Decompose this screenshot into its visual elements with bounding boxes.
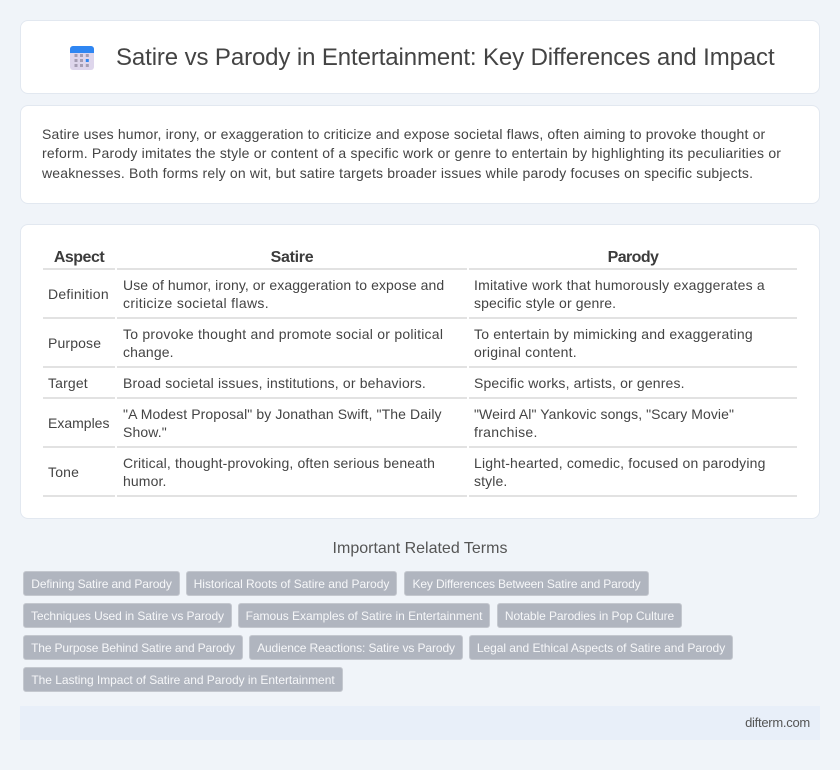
- related term tags: Techniques Used in Satire vs Parody: [31, 609, 224, 623]
- row: definition: Definition: [48, 286, 109, 302]
- related term tags: [23, 571, 733, 692]
- table header: [54, 249, 659, 266]
- table header: Satire: [271, 249, 313, 266]
- row: examples: [48, 406, 734, 440]
- row: purpose: Purpose: [48, 335, 101, 351]
- intro panel: [20, 105, 820, 204]
- table header: Parody: [608, 249, 658, 266]
- row: target: Specific works, artists, or genres.: [474, 375, 685, 391]
- icon: calendar: [70, 46, 94, 70]
- row: tone: Light-hearted, comedic, focused on parodying: [474, 455, 766, 471]
- row: tone: Tone: [48, 464, 79, 480]
- intro text: [42, 126, 781, 181]
- related term tags: Notable Parodies in Pop Culture: [505, 609, 674, 623]
- title: Satire vs Parody in Entertainment: Key Differences and Impact: [116, 44, 775, 71]
- related term tags: Historical Roots of Satire and Parody: [194, 577, 389, 591]
- related term tags: Famous Examples of Satire in Entertainment: [246, 609, 482, 623]
- row: target: Target: [48, 375, 88, 391]
- row: tone: [48, 455, 766, 489]
- row: definition: [48, 277, 765, 311]
- row: target: Broad societal issues, institutions, or behaviors.: [123, 375, 426, 391]
- footer brand: difterm.com: [745, 715, 810, 730]
- related term tags: Key Differences Between Satire and Parody: [413, 577, 640, 591]
- row: target: [48, 375, 685, 391]
- row: examples: franchise.: [474, 424, 538, 440]
- row: examples: "Weird Al" Yankovic songs, "Scary Movie": [474, 406, 734, 422]
- row: examples: Show.": [123, 424, 167, 440]
- intro text: reform. Parody imitates the style or content of a specific work or genre to entertain by highlighting its peculiarities or: [42, 145, 781, 161]
- row: purpose: original content.: [474, 344, 577, 360]
- row: examples: "A Modest Proposal" by Jonathan Swift, "The Daily: [123, 406, 442, 422]
- row: definition: criticize societal flaws.: [123, 295, 269, 311]
- row: purpose: change.: [123, 344, 174, 360]
- row: purpose: [48, 326, 753, 360]
- row: tone: Critical, thought-provoking, often serious beneath: [123, 455, 435, 471]
- related term tags: The Purpose Behind Satire and Parody: [31, 641, 235, 655]
- related term tags: Legal and Ethical Aspects of Satire and Parody: [477, 641, 725, 655]
- table header: Aspect: [54, 249, 104, 266]
- intro text: weaknesses. Both forms rely on wit, but satire targets broader issues while parody focuses on specific subjects.: [42, 165, 753, 181]
- header panel: [20, 20, 820, 94]
- row: definition: specific style or genre.: [474, 295, 616, 311]
- related terms heading: Important Related Terms: [333, 540, 507, 557]
- row: purpose: To entertain by mimicking and exaggerating: [474, 326, 753, 342]
- comparison table panel: [20, 224, 820, 519]
- row: purpose: To provoke thought and promote social or political: [123, 326, 443, 342]
- related term tags: The Lasting Impact of Satire and Parody in Entertainment: [31, 673, 335, 687]
- intro text: Satire uses humor, irony, or exaggeration to criticize and expose societal flaws, often aiming to provoke thought or: [42, 126, 765, 142]
- row: examples: Examples: [48, 415, 109, 431]
- row: definition: Use of humor, irony, or exaggeration to expose and: [123, 277, 444, 293]
- row: tone: humor.: [123, 473, 167, 489]
- row: definition: Imitative work that humorously exaggerates a: [474, 277, 765, 293]
- related term tags: Defining Satire and Parody: [31, 577, 172, 591]
- footer bar: [20, 706, 820, 740]
- row: tone: style.: [474, 473, 507, 489]
- related term tags: Audience Reactions: Satire vs Parody: [257, 641, 455, 655]
